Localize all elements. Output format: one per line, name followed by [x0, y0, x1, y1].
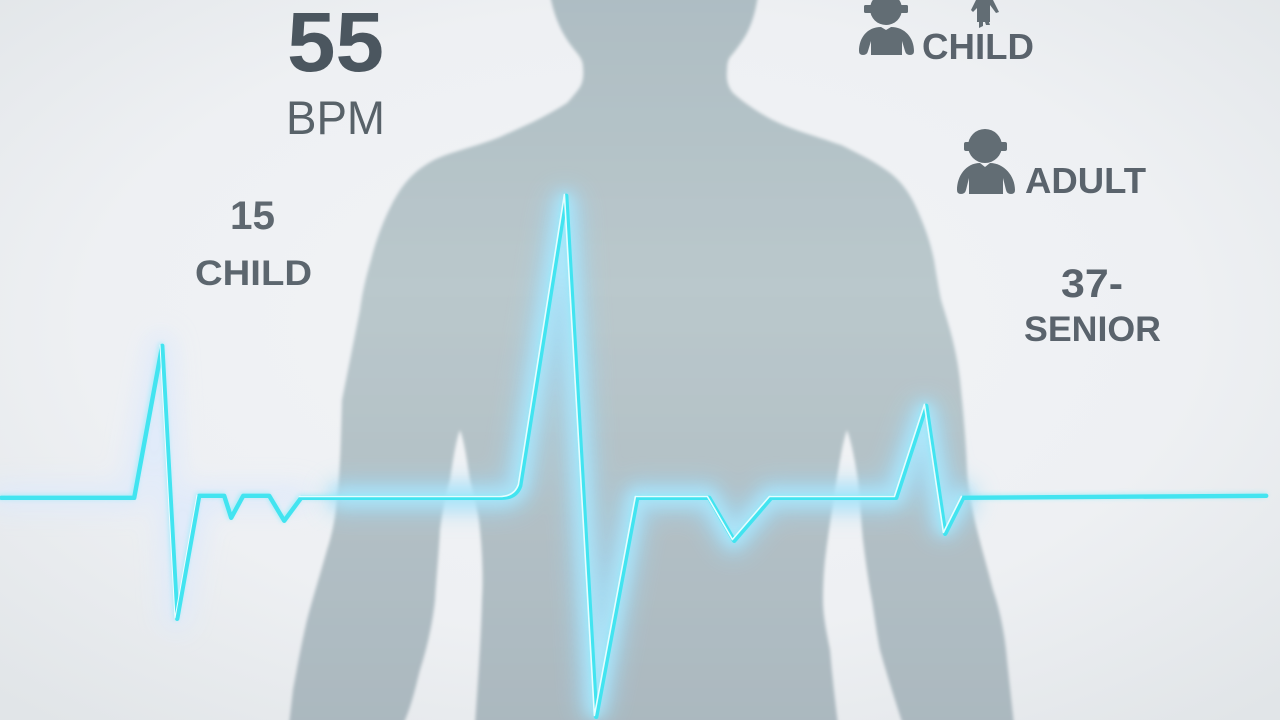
icon: person with headset: [859, 0, 914, 55]
ECG heartbeat line: [0, 194, 1266, 717]
unit BPM: BPM: [286, 91, 385, 144]
heart rate readout: 55 BPM: [286, 0, 385, 144]
icon: small child figure: [971, 0, 999, 28]
soft halo under left beat: [0, 345, 300, 618]
label SENIOR: SENIOR: [1024, 310, 1161, 349]
label CHILD: CHILD: [922, 26, 1034, 67]
legend item: child: [859, 0, 1034, 67]
number 15: 15: [230, 194, 275, 238]
legend item: adult: [957, 129, 1146, 201]
label ADULT: ADULT: [1025, 160, 1146, 201]
label CHILD: CHILD: [195, 254, 312, 293]
wide glow around central beat: [340, 205, 962, 706]
white core of trace: [299, 194, 961, 716]
legend item: senior: [1024, 262, 1161, 349]
human silhouette: [289, 0, 1014, 720]
tight glow: [0, 195, 1265, 716]
icon: adult person with headset: [957, 129, 1015, 194]
inner glow around central beat: [340, 200, 962, 710]
number 37-: 37-: [1061, 262, 1123, 306]
white core of left spike: [160, 345, 197, 618]
cyan trace: [1, 196, 1266, 717]
left label: 15 CHILD: [195, 194, 312, 293]
